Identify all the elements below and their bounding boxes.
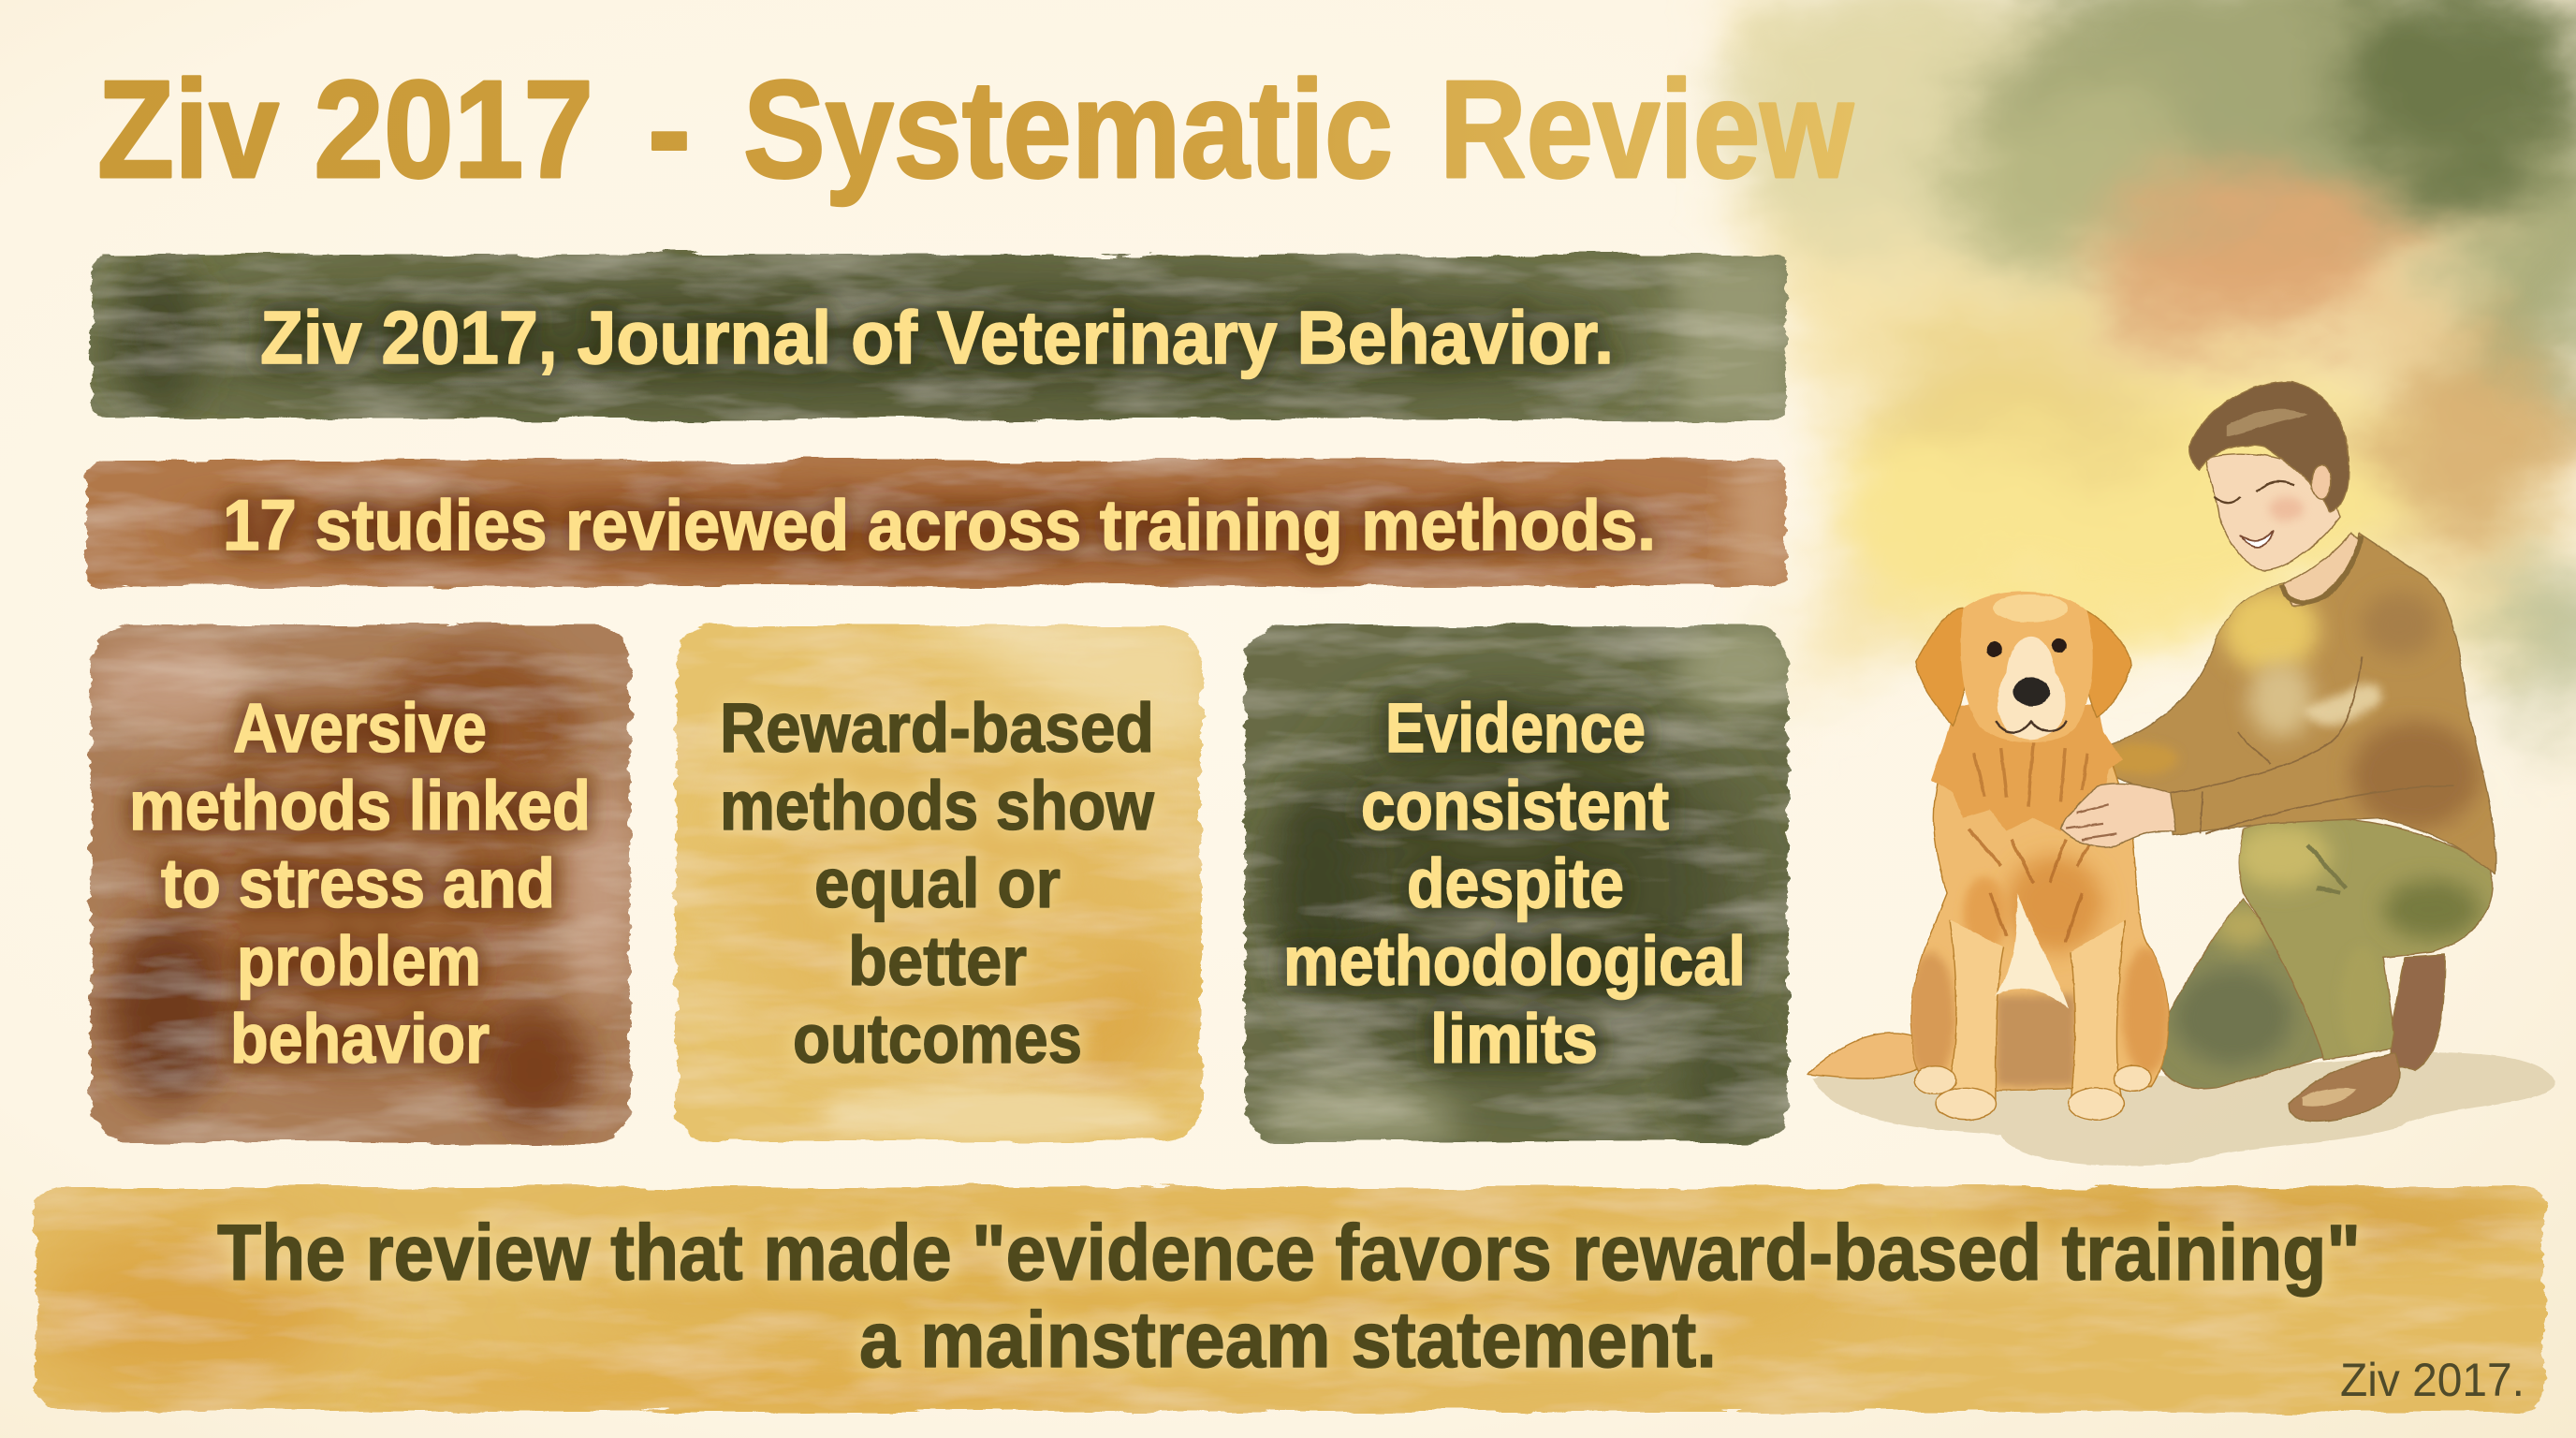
card text: aversive methods: Aversive [233, 689, 487, 767]
title: Ziv 2017 [97, 52, 593, 207]
card text: reward-based methods [720, 689, 1154, 1078]
card text: consistent evidence: Evidence [1385, 689, 1646, 767]
card text: consistent evidence: consistent [1361, 767, 1669, 844]
card text: consistent evidence [1283, 689, 1746, 1078]
dog: tail [1808, 1033, 1920, 1078]
card text: aversive methods: to stress and [161, 844, 555, 922]
man: far leg [2155, 899, 2324, 1089]
card: aversive methods [84, 618, 637, 1147]
man: near leg [2232, 818, 2493, 1060]
source note: Ziv 2017. [2340, 1354, 2525, 1406]
card text: consistent evidence: limits [1430, 1000, 1598, 1078]
card text: reward-based methods: better [848, 922, 1027, 1000]
title: Review [1440, 52, 1854, 207]
card text: reward-based methods: equal or [814, 844, 1061, 922]
conclusion text: The review that made "evidence favors reward-based training" [217, 1209, 2361, 1297]
dog: ears [1916, 609, 1969, 726]
banner: conclusion [28, 1180, 2551, 1418]
title [97, 52, 1854, 207]
dog: eyes [1987, 641, 2002, 656]
dog: body [1907, 732, 2171, 1092]
card text: consistent evidence: methodological [1283, 922, 1746, 1000]
illustration: man's hand on dog [2060, 784, 2176, 846]
card: reward-based methods [669, 618, 1208, 1147]
dog: neck ruff [1931, 705, 2122, 831]
dog: head [1961, 592, 2093, 742]
card text: consistent evidence: despite [1407, 844, 1624, 922]
man: neck [2284, 533, 2361, 606]
dog: front legs [1944, 920, 2004, 1100]
man: ear [2312, 465, 2331, 499]
dog: paws [1915, 1065, 2152, 1120]
man: front shoe [2289, 1053, 2400, 1122]
conclusion text: a mainstream statement. [859, 1296, 1717, 1384]
card: consistent evidence [1240, 618, 1807, 1152]
illustration: ground shadow [1812, 1051, 2555, 1166]
watercolor wash: upper right [1741, 0, 2576, 730]
card text: aversive methods: methods linked [129, 767, 591, 844]
card text: aversive methods [129, 689, 591, 1078]
dog: chest blaze [1996, 893, 2069, 1008]
card text: reward-based methods: outcomes [793, 1000, 1082, 1078]
banner text: journal: Ziv 2017, Journal of Veterinary Behavior. [260, 296, 1614, 379]
card text: reward-based methods: methods show [720, 767, 1154, 844]
illustration: golden retriever [1808, 592, 2171, 1120]
title: - [648, 52, 691, 207]
man: near arm contour [2169, 656, 2453, 834]
banner text: studies: 17 studies reviewed across training methods. [223, 486, 1656, 565]
dog: nose [2013, 678, 2050, 706]
card text: aversive methods: problem [237, 922, 481, 1000]
man: face [2205, 454, 2340, 571]
title: Systematic [743, 52, 1393, 207]
illustration: man kneeling [2103, 381, 2496, 1122]
man: back shoe [2392, 955, 2445, 1070]
banner: journal [84, 248, 1797, 426]
man: sweater [2103, 533, 2496, 874]
conclusion text [217, 1209, 2361, 1384]
card text: aversive methods: behavior [230, 1000, 490, 1078]
banner: studies [82, 456, 1792, 591]
man: hair [2189, 381, 2349, 511]
card text: reward-based methods: Reward-based [720, 689, 1154, 767]
